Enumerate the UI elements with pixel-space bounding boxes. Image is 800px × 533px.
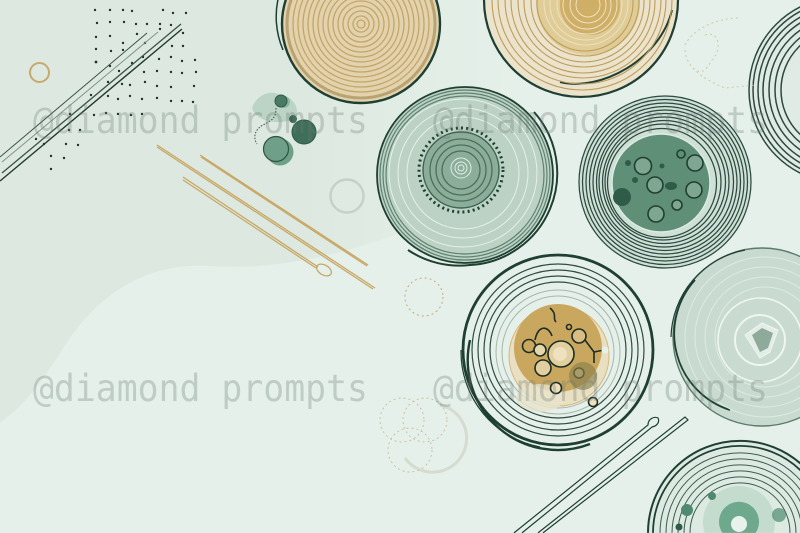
plate: top right rings <box>749 0 800 183</box>
plate: gold centre with molecules <box>461 255 653 450</box>
plate: tan spiral top left <box>276 0 440 103</box>
dashed gold circle <box>405 278 443 316</box>
watermark: @diamond prompts (x4): @diamond prompts <box>33 367 368 410</box>
watermark: @diamond prompts (x4): @diamond prompts <box>433 99 768 142</box>
stains bottom centre <box>380 398 467 472</box>
plate: bottom right green <box>648 441 800 533</box>
diagonal lines top left <box>0 24 182 181</box>
gold sticks upper <box>157 145 375 289</box>
watermark: @diamond prompts (x4): @diamond prompts <box>33 99 368 142</box>
dashed stain top right <box>685 18 755 88</box>
ring: grey <box>330 180 364 212</box>
plate: pale gold top centre <box>484 0 679 97</box>
plate: sage with dotted ring <box>377 87 557 266</box>
plate: dark ringed green with bubbles <box>579 96 751 268</box>
molecule <box>522 308 604 406</box>
ring: small gold <box>30 63 49 82</box>
green balls cluster <box>252 93 316 166</box>
watermark: @diamond prompts (x4) <box>33 99 768 410</box>
dot grid <box>35 9 197 170</box>
chopsticks bottom <box>514 417 688 533</box>
plate: pale grey green right <box>671 248 800 426</box>
watermark: @diamond prompts (x4): @diamond prompts <box>433 367 768 410</box>
bubbles <box>634 150 703 222</box>
